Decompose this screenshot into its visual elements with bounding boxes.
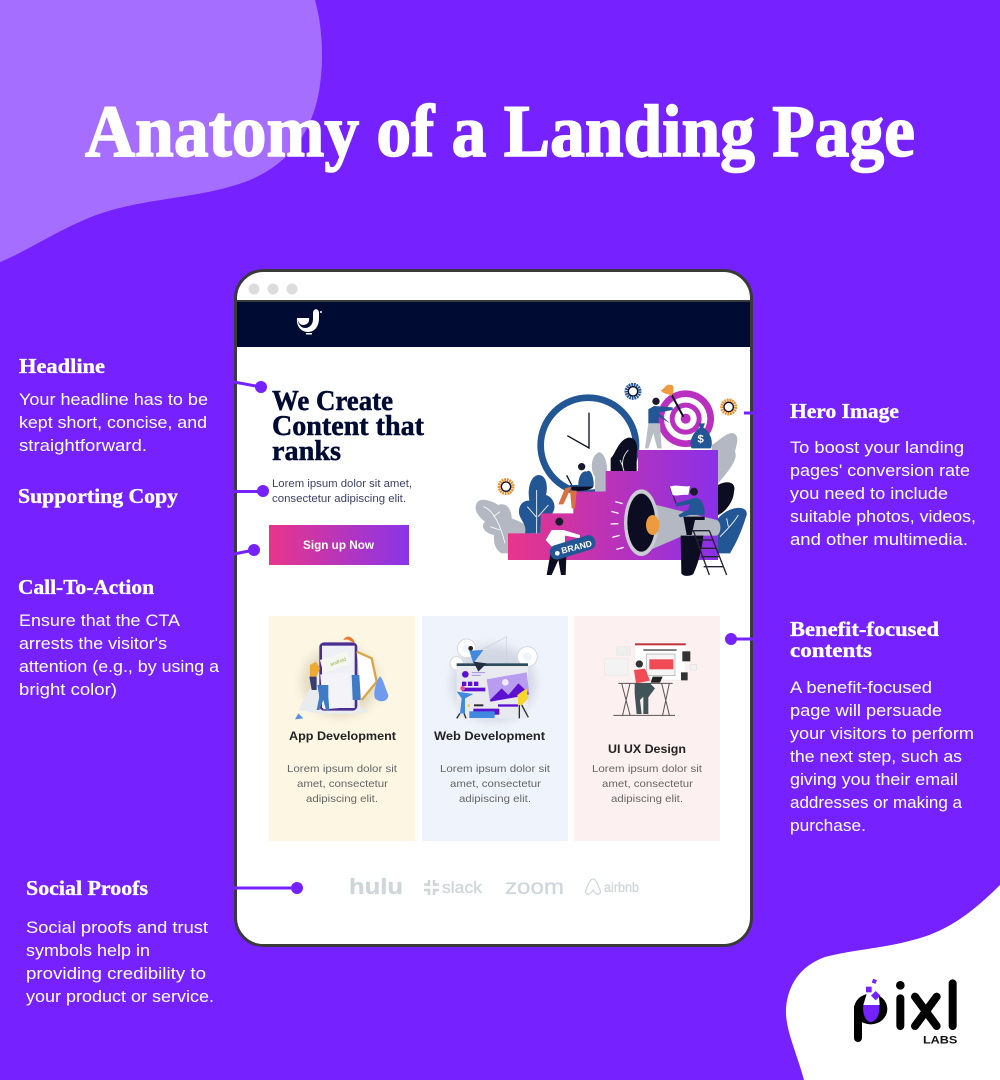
hero supporting copy: [272, 478, 412, 505]
callout: supporting copy: Supporting Copy: [18, 484, 179, 508]
body text: To boost your landing: [790, 438, 964, 457]
hero headline: [272, 386, 425, 467]
card text: [287, 763, 397, 805]
body text: pages' conversion rate: [790, 461, 970, 480]
heading: Benefit-focused: [790, 617, 939, 641]
person with flag: [670, 486, 705, 535]
hero supporting copy: Lorem ipsum dolor sit amet,: [272, 478, 412, 490]
card text: [440, 763, 550, 805]
body text: the next step, such as: [790, 747, 962, 766]
connector: call to action: [234, 544, 260, 556]
logo: zoom: zoom: [505, 876, 564, 899]
heading: Hero Image: [790, 399, 899, 423]
card heading: App Development: [289, 729, 396, 743]
body text: kept short, concise, and: [19, 413, 207, 432]
card text: Lorem ipsum dolor sit: [592, 763, 702, 775]
body text: purchase.: [790, 816, 866, 835]
connector: hero image: [744, 412, 780, 414]
body text: Your headline has to be: [19, 390, 208, 409]
body text: Social proofs and trust: [26, 918, 208, 937]
connector: social proofs: [234, 882, 303, 894]
card text: adipiscing elit.: [611, 793, 683, 805]
body text: [790, 438, 976, 549]
clock: [541, 398, 636, 493]
call to action button: [269, 525, 409, 565]
card: app development: [269, 616, 415, 841]
connector: supporting copy: [234, 485, 269, 497]
card text: amet, consectetur: [297, 778, 389, 790]
heading: Call-To-Action: [18, 575, 154, 599]
megaphone: [611, 489, 720, 556]
icon: bird logo: [297, 309, 322, 334]
body text: bright color): [19, 680, 117, 699]
body text: arrests the visitor's: [19, 634, 167, 653]
card text: [592, 763, 702, 805]
body text: [790, 678, 974, 835]
logo: pixl labs: LABS: [923, 1034, 958, 1046]
hero headline: Content that: [272, 411, 425, 442]
decorative blob: bottom right: [786, 885, 1000, 1080]
stairs: [508, 450, 718, 560]
gears: [500, 385, 735, 493]
illustration: web development: [450, 637, 537, 722]
body text: attention (e.g., by using a: [19, 657, 220, 676]
body text: addresses or making a: [790, 793, 963, 812]
connector: benefit contents: [725, 633, 780, 645]
browser title bar dots: [248, 284, 298, 294]
card text: amet, consectetur: [602, 778, 694, 790]
card text: amet, consectetur: [450, 778, 542, 790]
hero headline: We Create: [272, 386, 393, 417]
body text: [19, 390, 208, 455]
card: web development: [422, 616, 568, 841]
body text: [19, 611, 220, 699]
illustration: app development: android: [329, 657, 347, 668]
body text: page will persuade: [790, 701, 942, 720]
callout: benefit-focused contents: [790, 617, 974, 835]
callout: call-to-action: [18, 575, 220, 699]
decorative blob: top left: [0, 0, 322, 262]
target: [657, 385, 714, 447]
heading: [790, 617, 939, 662]
hero headline: ranks: [272, 436, 341, 467]
card text: Lorem ipsum dolor sit: [287, 763, 397, 775]
body text: your visitors to perform: [790, 724, 974, 743]
hero supporting copy: consectetur adipiscing elit.: [272, 493, 406, 505]
body text: [26, 918, 214, 1006]
body text: straightforward.: [19, 436, 147, 455]
body text: providing credibility to: [26, 964, 206, 983]
heading: Social Proofs: [26, 876, 148, 900]
heading: Headline: [19, 354, 105, 378]
title: Anatomy of a Landing Page: [85, 91, 915, 173]
money bag: $: [698, 434, 705, 446]
logo: hulu: hulu: [349, 874, 403, 899]
body text: giving you their email: [790, 770, 958, 789]
navigation bar: [237, 300, 750, 347]
illustration: UI UX design: [605, 643, 697, 715]
call to action button: Sign up Now: [303, 538, 375, 552]
card text: adipiscing elit.: [459, 793, 531, 805]
card heading: UI UX Design: [608, 742, 686, 756]
logo: slack: [424, 878, 483, 897]
person on stairs: [558, 463, 594, 508]
hero illustration: [476, 385, 747, 576]
callout: hero image: [790, 399, 976, 549]
panel: browser mockup: [236, 270, 752, 946]
heading: contents: [790, 638, 872, 662]
body text: and other multimedia.: [790, 530, 968, 549]
body text: your product or service.: [26, 987, 214, 1006]
card: UI UX design: [574, 616, 720, 841]
logo: slack: slack: [442, 878, 483, 897]
person with brand tag: [546, 518, 597, 575]
callout: headline: [19, 354, 208, 455]
logo: airbnb: [586, 879, 639, 895]
connector: headline: [234, 381, 267, 393]
illustration: app development: [295, 637, 388, 719]
card text: Lorem ipsum dolor sit: [440, 763, 550, 775]
logo: airbnb: airbnb: [604, 880, 639, 895]
person with brand tag: BRAND: [560, 538, 593, 556]
body text: symbols help in: [26, 941, 150, 960]
leaves: [476, 433, 747, 553]
person at target: [645, 398, 673, 448]
callout: social proofs: [26, 876, 214, 1006]
card text: adipiscing elit.: [306, 793, 378, 805]
logo: pixl labs: [854, 979, 958, 1046]
body text: you need to include: [790, 484, 948, 503]
money bag: [691, 423, 712, 448]
body text: Ensure that the CTA: [19, 611, 181, 630]
card heading: Web Development: [434, 729, 545, 743]
body text: A benefit-focused: [790, 678, 932, 697]
body text: suitable photos, videos,: [790, 507, 976, 526]
logo strip: [349, 874, 639, 899]
megaphone stand and ladder: [681, 531, 727, 576]
